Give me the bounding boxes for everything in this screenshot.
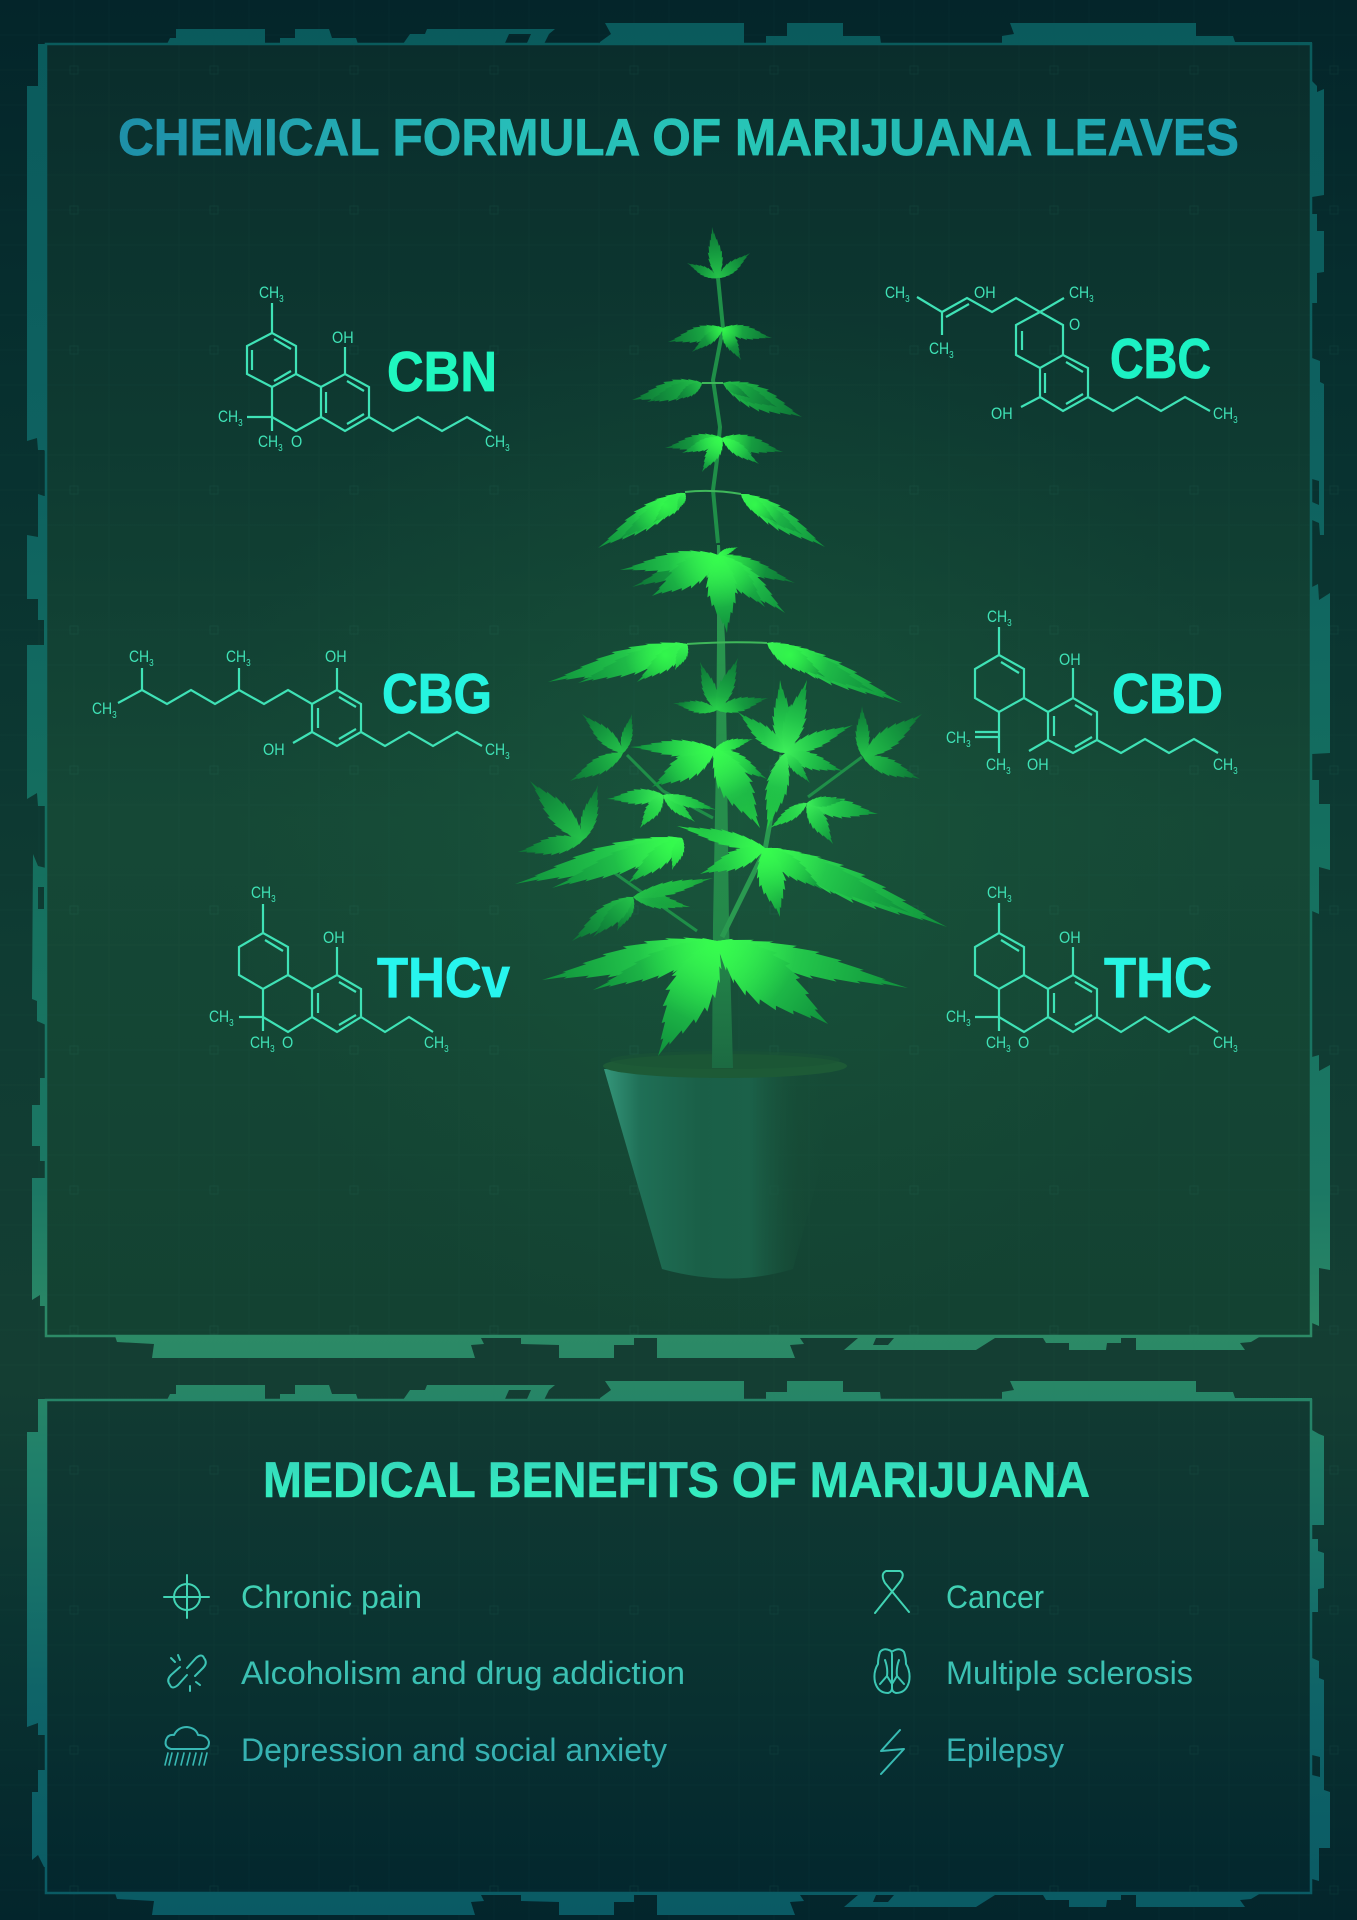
molecule: THCv: CH	[424, 1034, 444, 1052]
molecule: THC: CH	[987, 884, 1007, 902]
molecule: CBC: 3	[1233, 414, 1238, 425]
molecule: CBN: CH	[485, 433, 505, 451]
molecule: CBD: CH	[987, 608, 1007, 626]
molecule: CBG: CH	[92, 700, 112, 718]
molecule: CBC: CH	[929, 340, 949, 358]
label: CBG: CBG	[382, 662, 492, 726]
benefit: alcoholism and drug addiction	[168, 1655, 685, 1691]
plant stems	[613, 278, 862, 1068]
label: epilepsy: Epilepsy	[946, 1732, 1064, 1768]
molecule: CBG: 3	[112, 709, 117, 720]
molecule: CBC: OH	[974, 284, 996, 302]
molecule: CBN	[218, 284, 510, 453]
molecule: THC: OH	[1059, 929, 1081, 947]
molecule: THC: 3	[1007, 893, 1012, 904]
molecule: THC	[946, 884, 1238, 1054]
cannabis plant	[511, 226, 953, 1068]
benefit: epilepsy	[881, 1730, 1064, 1774]
label: multiple sclerosis: Multiple sclerosis	[946, 1655, 1193, 1691]
molecule: CBG: OH	[263, 741, 285, 759]
benefit: cancer	[875, 1571, 1044, 1615]
front leaves	[511, 432, 953, 1067]
label: depression and social anxiety: Depression and social anxiety	[241, 1732, 667, 1768]
molecule: CBD: CH	[1213, 756, 1233, 774]
molecule: CBD: 3	[966, 738, 971, 749]
molecule: CBD: 3	[1233, 765, 1238, 776]
molecule: CBG: CH	[129, 648, 149, 666]
molecule: CBC: O	[1069, 316, 1080, 334]
molecule: CBG: 3	[246, 657, 251, 668]
molecule: THCv	[209, 884, 510, 1054]
benefit: multiple sclerosis	[874, 1649, 1193, 1693]
icon: brain	[874, 1649, 910, 1693]
molecule: THC: O	[1018, 1034, 1029, 1052]
molecule: THCv: OH	[323, 929, 345, 947]
molecule: CBN: 3	[238, 417, 243, 428]
molecule: CBC: CH	[1213, 405, 1233, 423]
molecule: CBD: CH	[986, 756, 1006, 774]
label: THC: THC	[1104, 946, 1212, 1010]
flower pot	[603, 1051, 847, 1278]
molecule: CBG: CH	[485, 741, 505, 759]
molecule: CBN: OH	[332, 329, 354, 347]
molecule: THC: CH	[1213, 1034, 1233, 1052]
title: CHEMICAL FORMULA OF MARIJUANA LEAVES	[118, 109, 1239, 167]
molecule: THCv: CH	[209, 1008, 229, 1026]
molecule: CBN: CH	[259, 284, 279, 302]
molecule: CBD: OH	[1027, 756, 1049, 774]
molecule: CBC	[885, 284, 1238, 425]
icon: lightning bolt	[881, 1730, 904, 1774]
molecule: CBC: CH	[885, 284, 905, 302]
molecule: THC: CH	[946, 1008, 966, 1026]
molecule: CBC: OH	[991, 405, 1013, 423]
molecule: CBN: O	[291, 433, 302, 451]
molecule: CBG	[92, 648, 510, 761]
heading: medical benefits: MEDICAL BENEFITS OF MARIJUANA	[263, 1452, 1090, 1508]
molecule: THC: 3	[1006, 1043, 1011, 1054]
molecule: CBC: 3	[1089, 293, 1094, 304]
molecule: CBD: 3	[1006, 765, 1011, 776]
label: THCv: THCv	[377, 946, 510, 1010]
label: CBC: CBC	[1110, 327, 1211, 391]
molecule: CBG: OH	[325, 648, 347, 666]
icon: broken chain	[168, 1655, 206, 1691]
benefit: depression and social anxiety	[165, 1727, 667, 1768]
molecule: CBC: 3	[905, 293, 910, 304]
molecule: CBD	[946, 608, 1238, 776]
molecule: CBD: CH	[946, 729, 966, 747]
panel: medical benefits	[46, 1400, 1311, 1893]
molecule: CBN: 3	[505, 442, 510, 453]
label: CBN: CBN	[387, 340, 497, 404]
molecule: THCv: 3	[271, 893, 276, 904]
icon: ribbon	[875, 1571, 909, 1613]
molecule: THCv: 3	[444, 1043, 449, 1054]
molecule: THCv: O	[282, 1034, 293, 1052]
icon: crosshair	[164, 1575, 209, 1618]
molecule: THCv: 3	[229, 1017, 234, 1028]
glitch frame: top panel	[27, 23, 1330, 1358]
molecule: CBC: CH	[1069, 284, 1089, 302]
molecule: CBN: CH	[218, 408, 238, 426]
molecule: CBN: 3	[278, 442, 283, 453]
molecule: THC: CH	[986, 1034, 1006, 1052]
label: CBD: CBD	[1112, 662, 1223, 726]
label: chronic pain: Chronic pain	[241, 1579, 422, 1615]
molecule: CBG: 3	[505, 750, 510, 761]
molecule: CBC: 3	[949, 349, 954, 360]
back leaves	[516, 226, 928, 950]
molecule: CBG: CH	[226, 648, 246, 666]
benefit: chronic pain	[164, 1575, 422, 1618]
molecule: THC: 3	[966, 1017, 971, 1028]
molecule: CBG: 3	[149, 657, 154, 668]
molecule: CBD: 3	[1007, 617, 1012, 628]
label: cancer: Cancer	[946, 1579, 1044, 1615]
molecule: THC: 3	[1233, 1043, 1238, 1054]
molecule: CBN: 3	[279, 293, 284, 304]
molecule: THCv: 3	[270, 1043, 275, 1054]
glitch frame: bottom panel	[27, 1381, 1330, 1915]
leaf highlights	[624, 324, 824, 1012]
icon: rain cloud	[165, 1727, 209, 1765]
label: alcoholism and drug addiction: Alcoholism and drug addiction	[241, 1655, 685, 1691]
molecule: CBN: CH	[258, 433, 278, 451]
panel: chemical formula	[46, 44, 1311, 1336]
molecule: THCv: CH	[250, 1034, 270, 1052]
molecule: CBD: OH	[1059, 651, 1081, 669]
molecule: THCv: CH	[251, 884, 271, 902]
